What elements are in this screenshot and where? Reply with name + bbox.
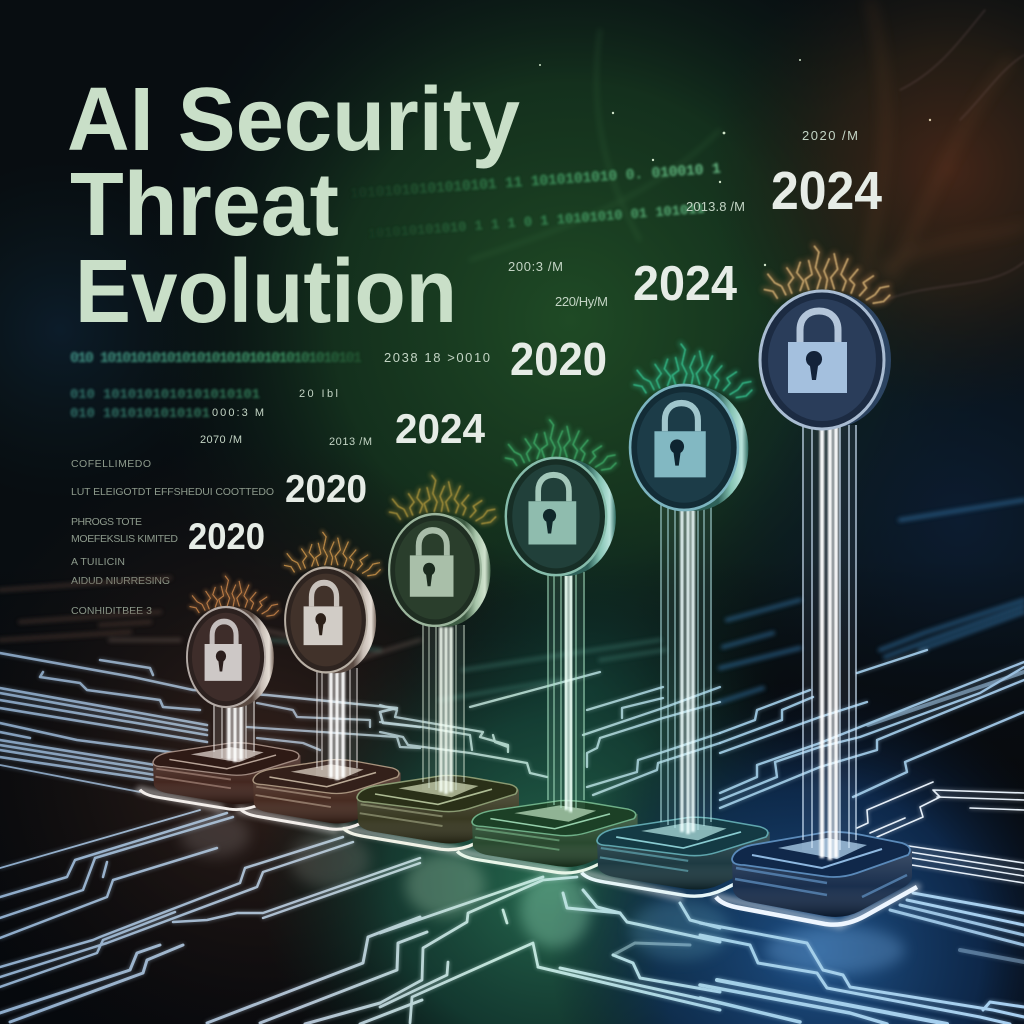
- left side notes: CONHIDITBEE 3: [71, 605, 152, 617]
- medallion 5: [630, 385, 748, 511]
- small year labels: 2013 /M: [329, 436, 372, 448]
- binary code streams: 10101010101010101 11 1010101010 0. 010010 1: [349, 161, 721, 203]
- small year labels: 2013.8 /M: [686, 199, 745, 214]
- tier 2: base, beam, lock medallion: [240, 532, 405, 829]
- title: Threat: [70, 155, 339, 255]
- lock 2: [304, 583, 342, 645]
- title: Evolution: [75, 242, 457, 342]
- large year labels: 2024: [395, 405, 486, 452]
- binary code streams: 010 10101010101010101010101010101010101: [70, 350, 362, 367]
- lock 6: [788, 311, 847, 393]
- medallion 4: [506, 458, 616, 576]
- small year labels: 200:3 /M: [508, 259, 563, 274]
- tier 1: base, beam, lock medallion: [140, 575, 305, 810]
- large year labels: 2020: [285, 468, 367, 511]
- reflections under bases: [180, 813, 905, 974]
- left side notes: COFELLIMEDO: [71, 458, 151, 470]
- medallion 6: [760, 291, 891, 429]
- base 6: [716, 832, 917, 925]
- traces: lower center: [380, 877, 577, 1023]
- large year labels: [188, 161, 882, 557]
- traces: behind pillars: [247, 672, 720, 795]
- tier 3: base, beam, lock medallion: [343, 475, 524, 850]
- beam 5: [660, 505, 712, 834]
- small year labels: 220/Hy/M: [555, 294, 608, 309]
- beam 1: [213, 700, 255, 762]
- lock 1: [205, 621, 242, 681]
- small year labels: [200, 128, 858, 448]
- traces: lower right: [538, 890, 1024, 1024]
- traces: upper left bands: [0, 653, 420, 792]
- spark 3: [390, 475, 496, 524]
- left side notes: LUT ELEIGOTDT EFFSHEDUI COOTTEDO: [71, 486, 274, 498]
- base 1: [140, 743, 305, 810]
- large year labels: 2024: [633, 257, 737, 311]
- large year labels: 2024: [771, 161, 882, 221]
- spark 6: [764, 245, 890, 303]
- tier 4: base, beam, lock medallion: [457, 419, 642, 873]
- left side notes: AIDUD NIURRESING: [71, 575, 170, 587]
- large year labels: 2020: [510, 333, 607, 385]
- small year labels: 2038 18 >0010: [384, 350, 490, 365]
- lock 4: [528, 475, 576, 545]
- binary code streams: 010 1010101010101: [70, 406, 210, 422]
- left side notes: PHROGS TOTE: [71, 516, 142, 528]
- base 5: [582, 817, 775, 896]
- spark 2: [284, 532, 381, 576]
- base 2: [240, 760, 405, 829]
- binary code streams: [70, 161, 721, 422]
- large year labels: 2020: [188, 516, 265, 557]
- circuit traces: [0, 650, 1024, 1024]
- beam 4: [547, 572, 585, 812]
- medallion 3: [389, 514, 490, 627]
- tier 6: base, beam, lock medallion: [716, 245, 917, 925]
- small year labels: 2070 /M: [200, 434, 242, 446]
- beam 6: [802, 425, 857, 860]
- spark 1: [190, 575, 279, 616]
- spark 4: [506, 419, 616, 470]
- title: AI Security: [67, 70, 520, 170]
- tier 5: base, beam, lock medallion: [582, 343, 775, 896]
- lock 5: [654, 403, 706, 477]
- spark 5: [634, 343, 752, 398]
- medallion 2: [285, 568, 376, 673]
- left side notes: MOEFEKSLIS KIMITED: [71, 533, 178, 545]
- beam 2: [316, 668, 358, 780]
- medallion 1: [187, 607, 274, 708]
- left side notes: [71, 458, 274, 617]
- floor streaks and out-of-focus traces: [0, 500, 1024, 702]
- small year labels: 2020 /M: [802, 128, 858, 143]
- base 3: [343, 775, 524, 850]
- small year labels: 20 Ibl: [299, 388, 338, 400]
- binary code streams: 010 1010101010101010101: [70, 387, 260, 403]
- traces: thin white right: [857, 782, 1024, 883]
- energy wisps top right: [470, 0, 1024, 300]
- base 4: [457, 801, 642, 873]
- small year labels: 000:3 M: [212, 407, 264, 419]
- traces: upper right rising: [720, 650, 1024, 808]
- left side notes: A TUILICIN: [71, 556, 125, 568]
- traces: lower left: [0, 810, 427, 1024]
- lock 3: [410, 530, 454, 597]
- binary code streams: 101010101010 1 1 1 0 1 10101010 01 101011: [367, 202, 705, 243]
- beam 3: [422, 625, 465, 794]
- title: [67, 70, 520, 342]
- glow beneath base edges: [140, 790, 917, 925]
